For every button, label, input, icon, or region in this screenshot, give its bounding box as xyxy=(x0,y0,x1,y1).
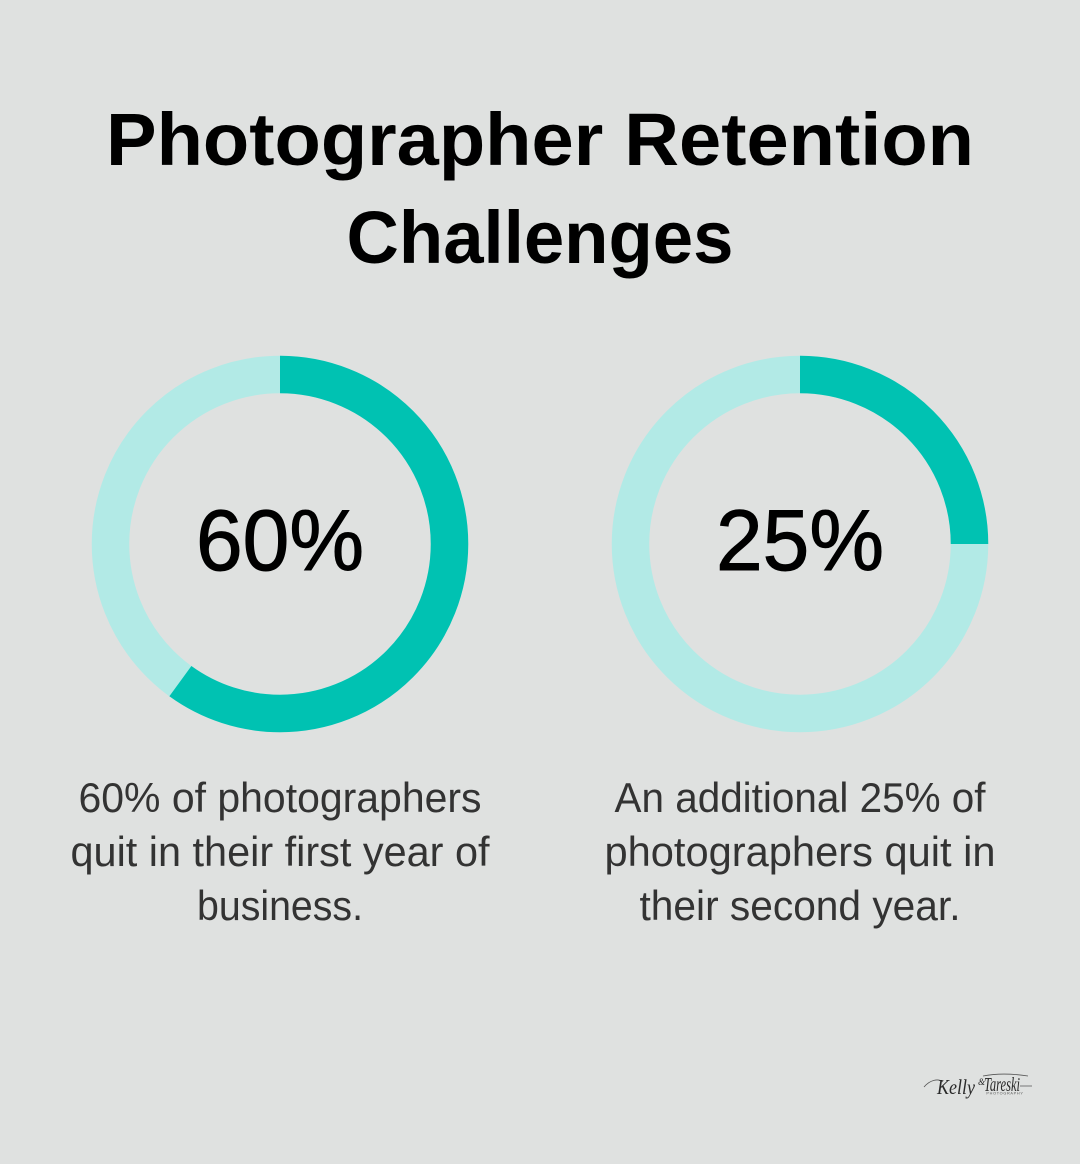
text block: 60% description: 60% of photographers xyxy=(78,774,482,821)
logo: signature: & xyxy=(978,1077,985,1087)
text block: 60% description: quit in their first year of xyxy=(70,828,490,875)
title: Challenges xyxy=(346,196,734,279)
logo: signature: Kelly xyxy=(936,1075,976,1099)
logo: signature xyxy=(924,1074,1032,1099)
text block: 25% description: their second year. xyxy=(640,882,960,929)
logo: signature: PHOTOGRAPHY xyxy=(986,1092,1024,1096)
donut chart: 25%: 25% xyxy=(716,493,884,589)
logo: signature: Tareski xyxy=(984,1074,1020,1096)
text block: 25% description: photographers quit in xyxy=(604,828,996,875)
text block: 60% description xyxy=(70,774,490,929)
donut chart: 60% xyxy=(110,374,450,714)
donut chart: 25% xyxy=(630,374,970,714)
text block: 25% description xyxy=(604,774,996,929)
text block: 25% description: An additional 25% of xyxy=(614,774,986,821)
donut chart: 60%: 60% xyxy=(196,493,364,589)
title xyxy=(106,98,974,279)
text block: 60% description: business. xyxy=(197,882,363,929)
title: Photographer Retention xyxy=(106,98,974,181)
